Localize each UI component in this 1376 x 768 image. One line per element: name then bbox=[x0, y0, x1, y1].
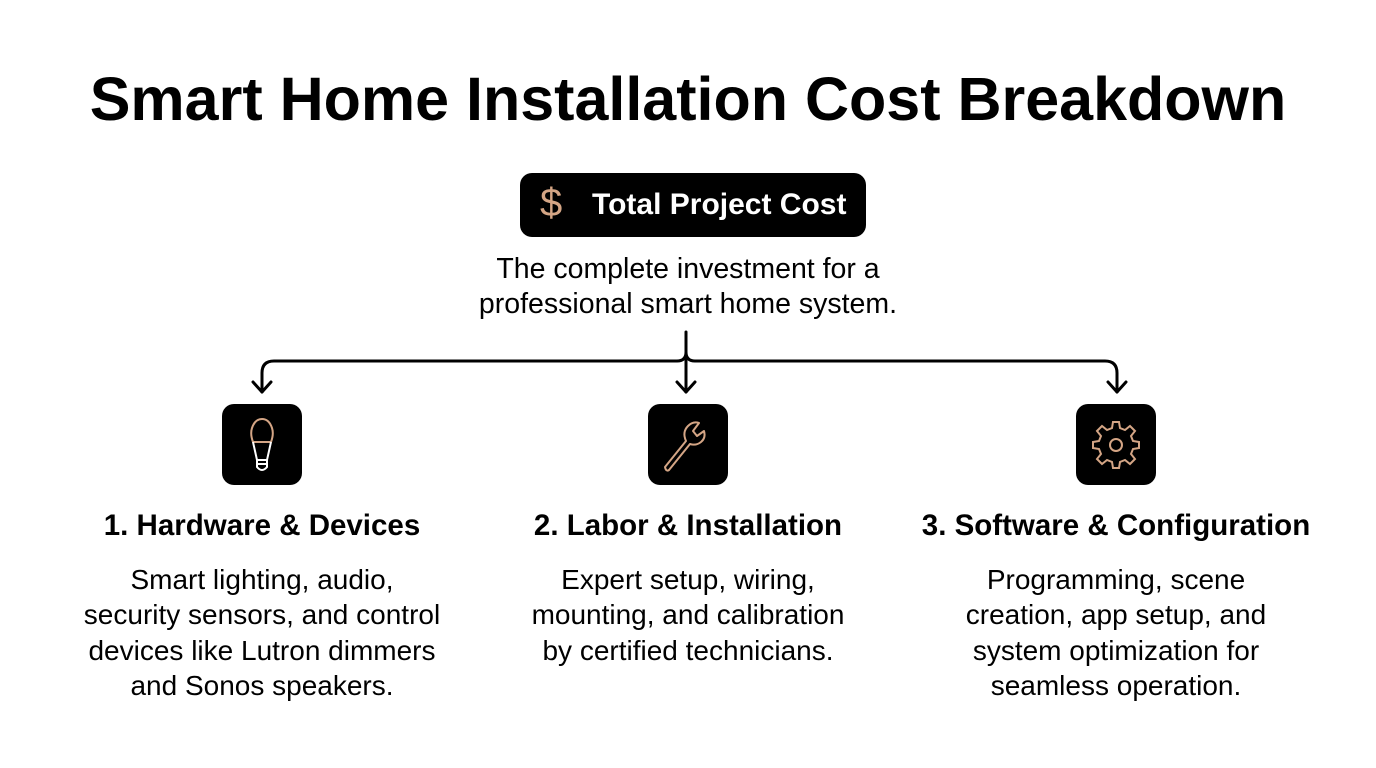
icon: wrench bbox=[648, 404, 728, 485]
column: hardware bbox=[84, 509, 440, 701]
column: hardware: devices like Lutron dimmers bbox=[88, 635, 436, 666]
icon: dollar sign: $ bbox=[540, 181, 562, 225]
column: software bbox=[922, 509, 1310, 701]
total project cost pill bbox=[520, 173, 866, 237]
column: hardware: security sensors, and control bbox=[84, 599, 440, 630]
subtitle text: The complete investment for a bbox=[496, 253, 880, 285]
icon: light bulb bbox=[222, 404, 302, 485]
column: labor: mounting, and calibration bbox=[532, 599, 844, 630]
column: labor: Expert setup, wiring, bbox=[561, 564, 815, 595]
title: Smart Home Installation Cost Breakdown bbox=[90, 65, 1286, 133]
column: software: Programming, scene bbox=[987, 564, 1245, 595]
column: labor bbox=[532, 509, 844, 666]
subtitle text: professional smart home system. bbox=[479, 288, 897, 320]
column: software: 3. Software & Configuration bbox=[922, 509, 1310, 542]
column: labor: by certified technicians. bbox=[542, 635, 834, 666]
column: software: system optimization for bbox=[973, 635, 1259, 666]
icon: gear bbox=[1076, 404, 1156, 485]
column: labor: 2. Labor & Installation bbox=[534, 509, 842, 542]
column: hardware: and Sonos speakers. bbox=[130, 670, 394, 701]
total project cost pill: Total Project Cost bbox=[592, 188, 846, 221]
subtitle text bbox=[479, 253, 897, 320]
column: hardware: 1. Hardware & Devices bbox=[104, 509, 420, 542]
column: software: seamless operation. bbox=[991, 670, 1241, 701]
column: hardware: Smart lighting, audio, bbox=[130, 564, 394, 595]
column: software: creation, app setup, and bbox=[966, 599, 1266, 630]
